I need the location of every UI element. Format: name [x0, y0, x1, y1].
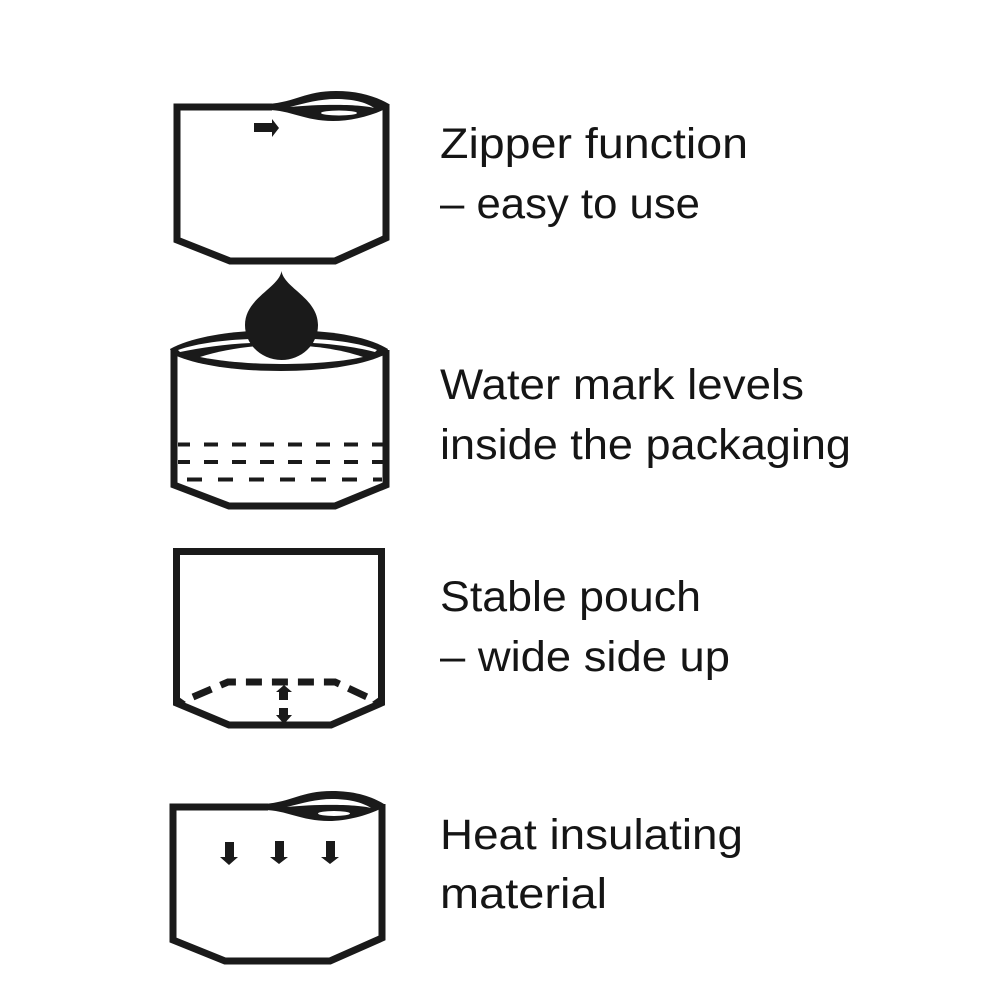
double arrow	[276, 685, 292, 724]
heading: water mark levels	[440, 361, 851, 469]
heading: heat insulating: material	[440, 870, 607, 918]
heading: stable pouch: Stable pouch	[440, 573, 701, 621]
heading: heat insulating: Heat insulating	[440, 811, 743, 859]
icon: stable pouch	[176, 552, 382, 725]
dashed gusset line	[193, 682, 367, 697]
icon: heat insulating pouch	[173, 791, 384, 961]
heading: heat insulating	[440, 811, 743, 918]
water mark dashes	[178, 444, 386, 480]
heading: stable pouch: – wide side up	[440, 633, 730, 681]
heading: zipper function: – easy to use	[440, 180, 700, 228]
icon: water mark pouch	[170, 271, 388, 506]
icon: water drop	[245, 271, 318, 360]
heading: zipper function: Zipper function	[440, 120, 748, 168]
heading: water mark levels: inside the packaging	[440, 421, 851, 469]
heat arrows	[220, 841, 339, 865]
icon: zipper pouch	[177, 91, 389, 261]
heading: zipper function	[440, 120, 748, 228]
icon: right arrow	[254, 119, 279, 137]
heading: water mark levels: Water mark levels	[440, 361, 804, 409]
heading: stable pouch	[440, 573, 730, 681]
